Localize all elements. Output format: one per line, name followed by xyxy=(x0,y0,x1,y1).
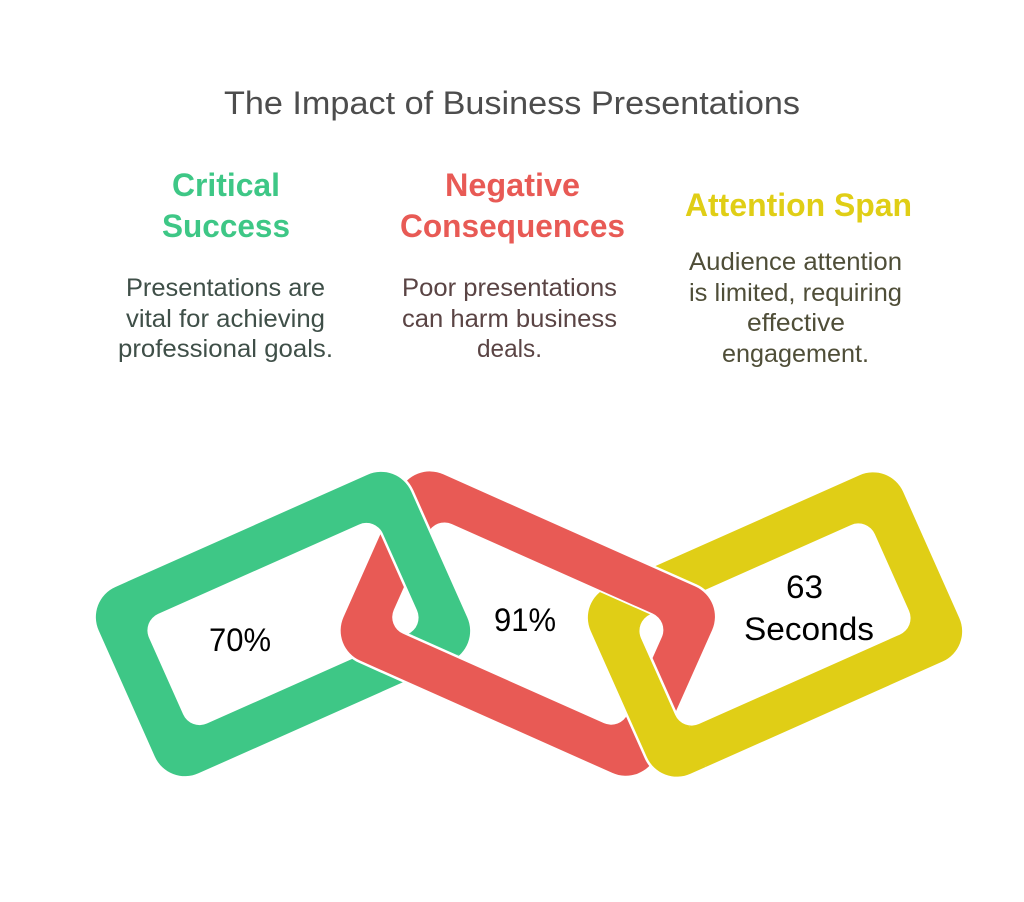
text block: critical success description: professional goals. xyxy=(118,335,333,363)
panel: critical success text xyxy=(118,167,333,363)
chain link: red xyxy=(330,461,726,786)
panel: negative consequences text xyxy=(400,167,625,363)
chart: interlocked chain of three links xyxy=(85,461,973,787)
text block: attention span description: engagement. xyxy=(722,340,869,368)
text block: negative consequences description: can harm business xyxy=(402,305,617,333)
heading: critical success: Success xyxy=(162,208,290,244)
chain overlap: green over red xyxy=(380,480,460,656)
chain link: green xyxy=(85,461,481,787)
heading: negative consequences: Negative xyxy=(445,167,580,203)
value: 63 seconds: Seconds xyxy=(744,611,874,647)
heading: negative consequences: Consequences xyxy=(400,208,625,244)
heading: negative consequences xyxy=(400,167,625,244)
text block: critical success description: vital for achieving xyxy=(126,305,325,333)
heading: attention span: Attention Span xyxy=(685,187,912,223)
value: 91%: 91% xyxy=(494,602,556,638)
text block: attention span description: effective xyxy=(747,309,845,337)
text block: attention span description xyxy=(689,248,902,368)
title: The Impact of Business Presentations xyxy=(224,85,800,121)
heading: critical success: Critical xyxy=(172,167,280,203)
text block: critical success description xyxy=(118,274,333,363)
text block: critical success description: Presentations are xyxy=(126,274,325,302)
text block: negative consequences description: Poor presentations xyxy=(402,274,617,302)
value: 63 seconds xyxy=(744,569,874,647)
heading: critical success xyxy=(162,167,290,244)
text block: attention span description: is limited, requiring xyxy=(689,279,902,307)
panel: attention span text xyxy=(685,187,912,368)
text block: negative consequences description: deals. xyxy=(477,335,542,363)
chain link: yellow xyxy=(577,462,973,787)
text block: attention span description: Audience attention xyxy=(689,248,902,276)
value: 63 seconds: 63 xyxy=(786,569,823,605)
chain overlap: yellow over red xyxy=(599,592,706,767)
value: 70%: 70% xyxy=(209,622,271,658)
text block: negative consequences description xyxy=(402,274,617,363)
